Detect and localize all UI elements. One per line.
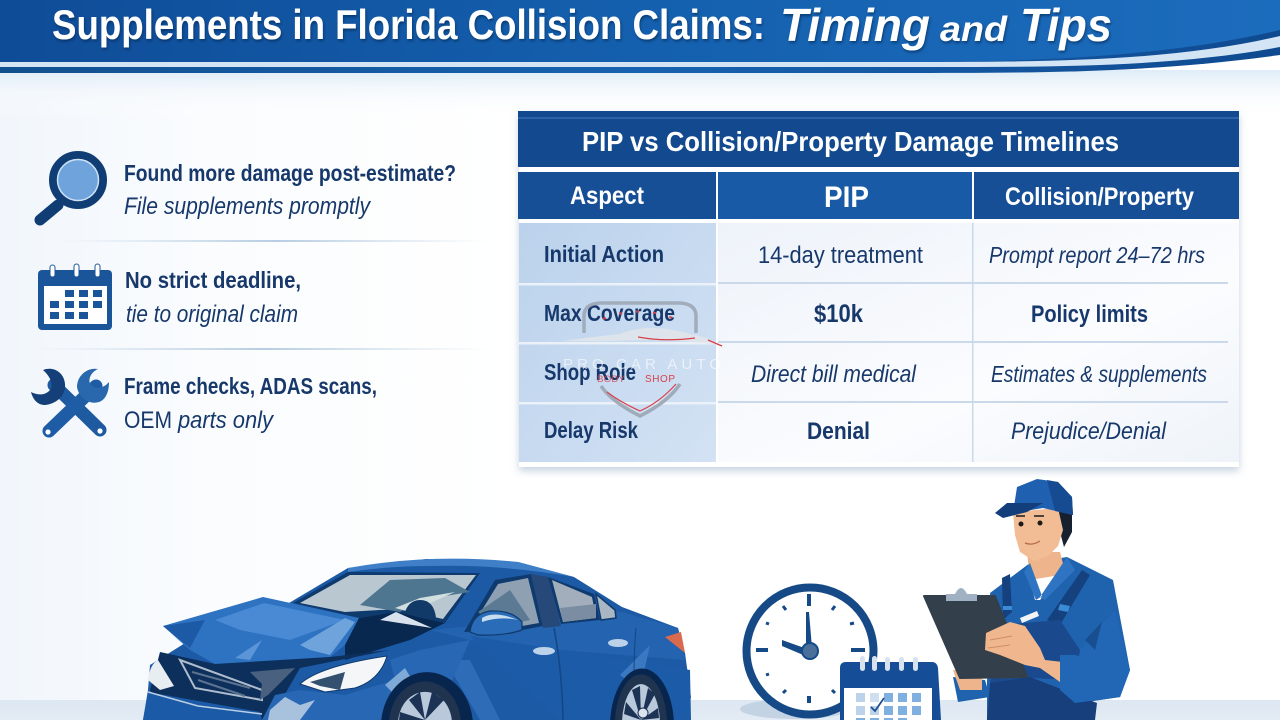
hand and forearm	[985, 622, 1063, 682]
forearm behind clipboard	[953, 677, 990, 702]
icon: magnifying glass	[40, 155, 103, 220]
row: initial action	[544, 241, 1205, 269]
row: initial action: Initial Action	[544, 241, 664, 267]
crumpled hood	[163, 597, 359, 664]
car body	[143, 559, 691, 720]
row: shop role: Direct bill medical	[751, 361, 917, 388]
icon: calendar	[38, 264, 112, 330]
tip 2 text	[125, 267, 301, 328]
title: Supplements in Florida Collision Claims:	[52, 1, 765, 48]
table title bar	[518, 111, 1239, 167]
front wheel	[389, 682, 461, 720]
fractured front	[150, 650, 390, 720]
watermark logo: PRO CAR AUTO	[563, 356, 721, 373]
header banner	[0, 0, 1280, 73]
windshield	[293, 572, 480, 623]
door lines and handles	[554, 628, 563, 720]
rear wheel	[615, 674, 667, 720]
tail light	[665, 632, 685, 653]
panel: tips list	[31, 155, 490, 435]
sleeve	[1060, 655, 1130, 703]
table header row: Collision/Property	[1005, 183, 1194, 211]
panel: timelines table	[518, 111, 1239, 467]
tip 1 text: File supplements promptly	[124, 193, 372, 220]
pen	[1020, 611, 1039, 623]
table header row	[518, 172, 1239, 219]
title: Tips	[1020, 0, 1112, 51]
row: max coverage	[544, 300, 1148, 328]
tip 3 text: OEM	[124, 407, 172, 434]
watermark logo	[562, 303, 722, 416]
table title bar: PIP vs Collision/Property Damage Timelines	[582, 126, 1119, 157]
tip 3 text: Frame checks, ADAS scans,	[124, 373, 377, 399]
side mirror	[470, 611, 522, 635]
ground band	[0, 700, 1280, 720]
door windows	[464, 574, 543, 632]
row: max coverage: Policy limits	[1031, 301, 1148, 328]
clipboard	[924, 596, 1027, 678]
cap	[1013, 479, 1073, 515]
tip 2 text: No strict deadline,	[125, 267, 301, 293]
icon: crossed wrenches	[31, 369, 109, 435]
illustration: calendar	[840, 656, 941, 720]
trousers	[987, 677, 1097, 720]
table header row: Aspect	[570, 182, 645, 210]
torso and shirt	[987, 557, 1130, 720]
engine bay	[345, 612, 445, 660]
table header row: PIP	[824, 181, 869, 214]
watermark logo: SHOP	[645, 374, 675, 385]
row: max coverage: Max Coverage	[544, 300, 675, 326]
watermark logo: BODY	[597, 374, 625, 384]
bumper damage	[262, 640, 470, 720]
row: delay risk: Prejudice/Denial	[1011, 418, 1167, 445]
neck and collar	[1027, 552, 1066, 592]
illustration: damaged blue car	[143, 559, 691, 720]
row: max coverage: $10k	[814, 300, 863, 328]
face	[1013, 508, 1063, 561]
headlight	[300, 656, 387, 692]
tip 2 text: tie to original claim	[126, 301, 298, 328]
tip 3 text: parts only	[177, 407, 275, 434]
row: delay risk: Denial	[807, 418, 870, 445]
tip 1 text: Found more damage post-estimate?	[124, 160, 456, 186]
row: delay risk	[544, 417, 1167, 445]
wheel arches and wheels	[381, 672, 473, 720]
row: delay risk: Delay Risk	[544, 417, 638, 443]
tip 1 text	[124, 160, 456, 220]
row: shop role	[544, 359, 1207, 388]
title: and	[940, 10, 1008, 49]
illustration: technician with clipboard	[924, 479, 1130, 720]
hair	[1055, 510, 1072, 547]
row: shop role: Shop Role	[544, 359, 636, 385]
overall straps and bib	[1002, 570, 1090, 625]
illustration: wall clock	[740, 588, 874, 719]
row: shop role: Estimates & supplements	[991, 361, 1207, 387]
tip 3 text	[124, 373, 377, 434]
row: initial action: 14-day treatment	[758, 242, 923, 269]
title: Timing	[780, 0, 930, 51]
row: initial action: Prompt report 24–72 hrs	[989, 242, 1205, 268]
table body	[519, 223, 1239, 462]
